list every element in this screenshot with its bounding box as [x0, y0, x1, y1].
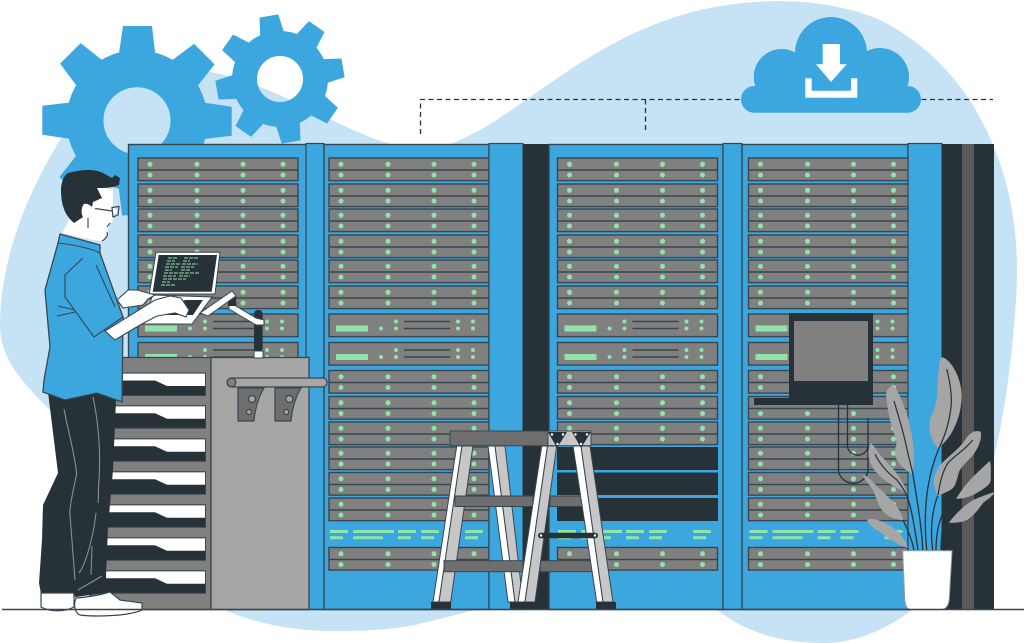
front shoe — [75, 592, 142, 616]
dark side column — [942, 144, 994, 610]
laptop arm stand — [228, 297, 264, 358]
plant leaves — [863, 357, 995, 548]
ladder hinges and spreader — [538, 432, 598, 538]
rack pillar — [306, 144, 324, 610]
rack pillar — [489, 144, 523, 610]
icon: small gear — [215, 14, 345, 144]
plant pot — [903, 551, 952, 610]
ear — [82, 204, 92, 217]
panel: server rack 2 — [324, 144, 489, 610]
laptop base tray — [142, 291, 236, 324]
technician near arm — [105, 296, 189, 340]
cabinet brackets — [238, 388, 301, 421]
panel: server rack 4 — [742, 144, 908, 610]
rack pillar — [908, 144, 942, 610]
ladder top platform — [450, 431, 591, 446]
ladder front legs — [518, 446, 613, 602]
back shoe — [41, 593, 74, 611]
cabinet drawers — [90, 373, 206, 593]
plant leaf veins — [875, 369, 973, 495]
glasses — [95, 206, 119, 217]
ladder back legs — [433, 446, 523, 602]
technician far hand — [117, 290, 155, 308]
ladder feet — [431, 602, 616, 610]
rack pillar — [723, 144, 742, 610]
panel: server rack 3 — [549, 144, 723, 610]
laptop — [142, 252, 236, 324]
dashed network lines — [420, 100, 993, 134]
potted plant — [863, 357, 995, 610]
plant stems — [880, 448, 945, 550]
workstation cabinet — [90, 358, 327, 610]
ladder steps — [444, 496, 592, 572]
trousers — [39, 390, 116, 597]
neck and face — [62, 186, 118, 241]
floor line — [2, 608, 1024, 610]
icon: download cloud — [741, 17, 921, 113]
blue shirt — [43, 234, 123, 402]
technician figure — [39, 170, 142, 616]
laptop screen — [149, 252, 220, 294]
step ladder — [431, 431, 616, 610]
cabinet rail — [227, 378, 327, 387]
panel: server rack 1 — [128, 144, 306, 610]
wall monitor with cables — [754, 313, 873, 483]
dark gap column — [523, 144, 549, 610]
hair — [61, 170, 120, 223]
icon: large gear — [42, 26, 232, 215]
